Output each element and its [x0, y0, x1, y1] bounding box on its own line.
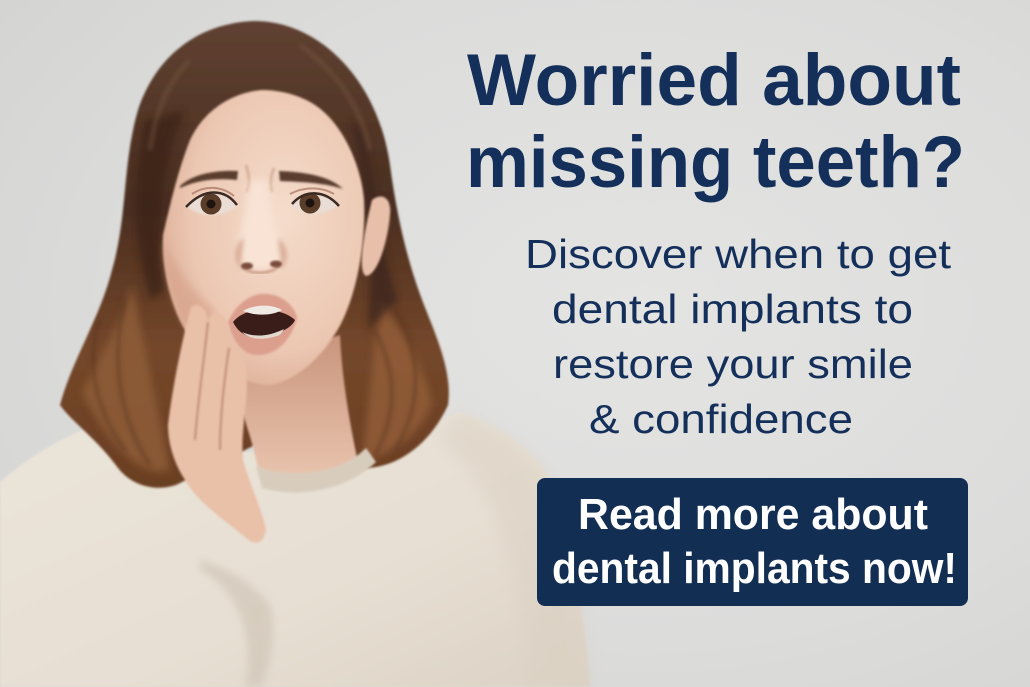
- left eye: [186, 188, 237, 215]
- cheek shading: [163, 240, 215, 345]
- subtitle text: Discover when to get: [525, 231, 952, 277]
- face: [163, 90, 364, 385]
- call to action button: dental implants now!: [552, 544, 957, 593]
- hand: [168, 305, 266, 542]
- right eye: [290, 188, 339, 214]
- sweater: [0, 412, 590, 687]
- photo: worried woman holding her cheek: [0, 21, 590, 687]
- subtitle text: dental implants to: [552, 286, 913, 332]
- collar: [256, 448, 376, 492]
- mouth: [228, 294, 297, 355]
- title: [466, 40, 965, 203]
- ear: [362, 196, 390, 276]
- neck: [225, 335, 358, 478]
- call to action button: Read more about: [578, 490, 928, 539]
- frown lines: [246, 165, 274, 192]
- subtitle text: & confidence: [589, 396, 853, 442]
- title: missing teeth?: [466, 122, 965, 203]
- hair: [60, 21, 449, 488]
- nose: [235, 180, 287, 273]
- call to action button: [537, 478, 968, 606]
- title: Worried about: [467, 40, 961, 121]
- subtitle text: restore your smile: [553, 341, 913, 387]
- subtitle text: [525, 231, 952, 442]
- eyebrows: [180, 171, 238, 188]
